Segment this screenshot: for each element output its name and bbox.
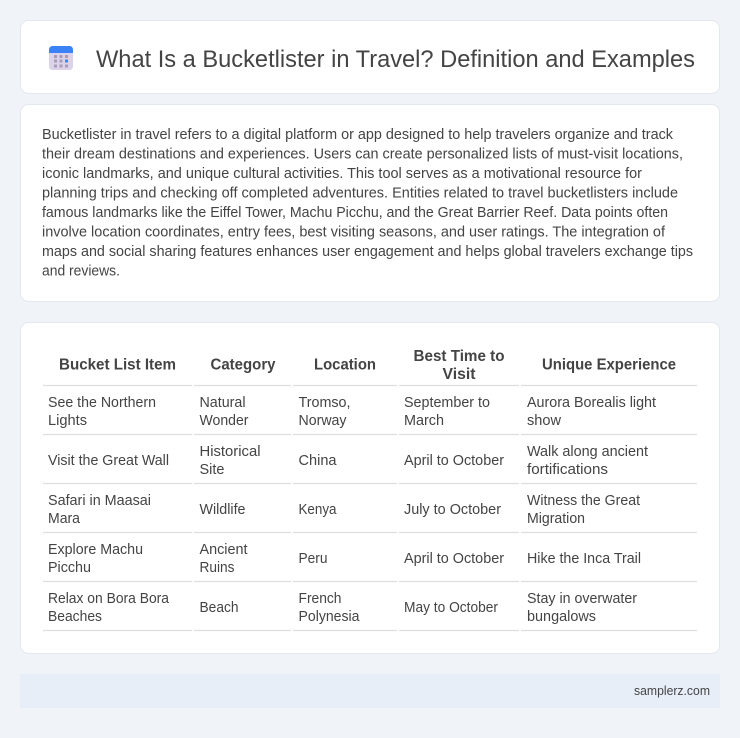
text block: description paragraph: famous landmarks like the Eiffel Tower, Machu Picchu, and the Great Barrier Reef. Data points often — [42, 205, 668, 221]
table row: Machu Picchu: Ancient — [200, 542, 248, 558]
table row: Maasai Mara — [48, 493, 640, 527]
table row: Machu Picchu: Hike the Inca Trail — [527, 551, 641, 567]
table row: Great Wall: Visit the Great Wall — [48, 453, 169, 469]
text block: description paragraph: planning trips and checking off completed adventures. Entities related to travel bucketlisters include — [42, 186, 678, 202]
table row: Northern Lights — [48, 395, 656, 429]
table header row — [59, 348, 676, 383]
table row: Bora Bora: French — [298, 591, 342, 607]
table row: Great Wall: Walk along ancient — [527, 444, 648, 460]
table row: Northern Lights: Wonder — [200, 413, 249, 429]
table row: Bora Bora: May to October — [404, 600, 498, 616]
table row: Bora Bora: Relax on Bora Bora — [48, 591, 169, 607]
footer — [20, 674, 720, 708]
panel: description — [20, 104, 720, 302]
table row: Bora Bora: Beaches — [48, 609, 102, 625]
table row: Maasai Mara: Wildlife — [200, 502, 246, 518]
table row lines — [43, 386, 697, 630]
table row: Great Wall: China — [298, 453, 336, 469]
table row: Northern Lights: Norway — [298, 413, 347, 429]
table row: Great Wall: Site — [200, 462, 224, 478]
table header row: Bucket List Item — [59, 356, 176, 374]
table row: Bora Bora: Beach — [200, 600, 238, 616]
table row: Northern Lights: September to — [404, 395, 490, 411]
table row: Maasai Mara: Migration — [527, 511, 585, 527]
table header row: Visit — [442, 366, 476, 383]
table row: Northern Lights: Tromso, — [298, 395, 350, 411]
table row: Northern Lights: Aurora Borealis light — [527, 395, 656, 411]
text block: description paragraph: maps and social sharing features enhances user engagement and helps global travelers exchange tips — [42, 244, 693, 260]
table header row: Category — [210, 356, 276, 374]
text block: description paragraph: involve location coordinates, entry fees, best visiting seasons, and user ratings. The integration of — [42, 224, 666, 240]
table row: Bora Bora: bungalows — [527, 609, 596, 625]
text block: description paragraph: iconic landmarks, and unique cultural activities. This tool serves as a motivational resource for — [42, 166, 642, 182]
table header row: Best Time to — [414, 348, 505, 365]
table row: Machu Picchu: Ruins — [200, 560, 234, 576]
text block: description paragraph: their dream destinations and experiences. Users can create personalized lists of must-visit locations, — [42, 146, 683, 162]
table row: Bora Bora: Polynesia — [298, 609, 360, 625]
table header row: Unique Experience — [542, 356, 676, 374]
table row: Northern Lights: show — [527, 413, 562, 429]
table row: Maasai Mara: Witness the Great — [527, 493, 640, 509]
panel: bucket list table — [20, 322, 720, 654]
table row: Great Wall: Historical — [200, 444, 260, 460]
table header row: Location — [314, 356, 376, 374]
table row: Machu Picchu: Picchu — [48, 560, 91, 576]
icon: calendar — [49, 46, 73, 70]
table row: Great Wall — [48, 444, 648, 478]
table row: Maasai Mara: Mara — [48, 511, 80, 527]
text block: description paragraph: Bucketlister in travel refers to a digital platform or app designed to help travelers organize and track — [42, 127, 674, 143]
text block: description paragraph — [42, 127, 693, 280]
table row: Machu Picchu — [48, 542, 641, 576]
table row: Maasai Mara: Kenya — [298, 502, 336, 518]
table row: Machu Picchu: April to October — [404, 551, 504, 567]
table row: Northern Lights: March — [404, 413, 444, 429]
panel: header — [20, 20, 720, 94]
table row: Great Wall: fortifications — [527, 462, 608, 478]
text block: description paragraph: and reviews. — [42, 264, 120, 280]
table row: Northern Lights: Lights — [48, 413, 87, 429]
table row: Maasai Mara: Safari in Maasai — [48, 493, 151, 509]
table row: Maasai Mara: July to October — [404, 502, 501, 518]
table row: Northern Lights: See the Northern — [48, 395, 156, 411]
table row: Machu Picchu: Explore Machu — [48, 542, 143, 558]
footer credit: samplerz.com — [634, 684, 710, 698]
table row: Great Wall: April to October — [404, 453, 504, 469]
table row: Bora Bora — [48, 591, 637, 625]
table row: Northern Lights: Natural — [200, 395, 246, 411]
title: What Is a Bucketlister in Travel? Definition and Examples — [96, 46, 695, 73]
table row: Machu Picchu: Peru — [298, 551, 328, 567]
table row: Bora Bora: Stay in overwater — [527, 591, 637, 607]
